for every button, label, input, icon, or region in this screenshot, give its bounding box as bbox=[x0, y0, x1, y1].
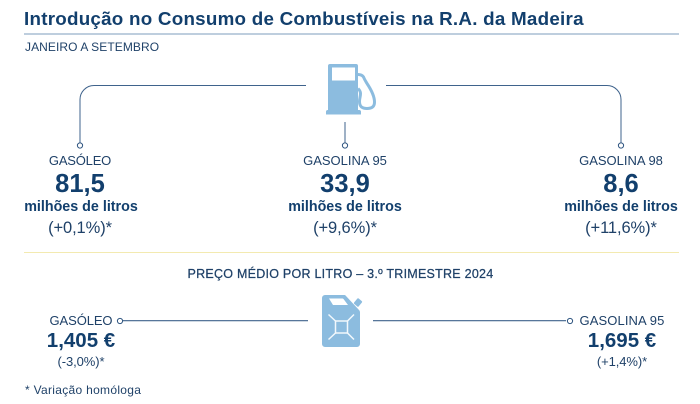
price change: (-3,0%)* bbox=[58, 354, 104, 369]
section heading: PREÇO MÉDIO POR LITRO – 3.º TRIMESTRE 2024 bbox=[188, 267, 493, 281]
price: 1,405 €: 1,405 € bbox=[47, 329, 115, 352]
value: 8,6: 8,6 bbox=[603, 170, 639, 198]
unit: milhões de litros bbox=[288, 199, 402, 215]
unit: milhões de litros bbox=[24, 199, 138, 215]
price label: Gasolina 95: GASOLINA 95 bbox=[580, 313, 664, 328]
value: 33,9: 33,9 bbox=[320, 170, 370, 198]
price: 1,695 €: 1,695 € bbox=[588, 329, 656, 352]
title: Introdução no Consumo de Combustíveis na R.A. da Madeira bbox=[24, 8, 584, 29]
heading: Gasolina 95: GASOLINA 95 bbox=[303, 153, 387, 168]
value: 81,5: 81,5 bbox=[55, 170, 105, 198]
subtitle: JANEIRO A SETEMBRO bbox=[25, 40, 159, 54]
footnote: * Variação homóloga bbox=[25, 383, 141, 397]
price change: (+1,4%)* bbox=[597, 354, 647, 369]
heading: Gasolina 98: GASOLINA 98 bbox=[579, 153, 663, 168]
heading: Gasóleo: GASÓLEO bbox=[49, 153, 111, 168]
change: (+0,1%)* bbox=[48, 219, 112, 237]
price label: Gasóleo: GASÓLEO bbox=[50, 313, 112, 328]
change: (+11,6%)* bbox=[585, 219, 657, 237]
change: (+9,6%)* bbox=[313, 219, 377, 237]
unit: milhões de litros bbox=[564, 199, 678, 215]
